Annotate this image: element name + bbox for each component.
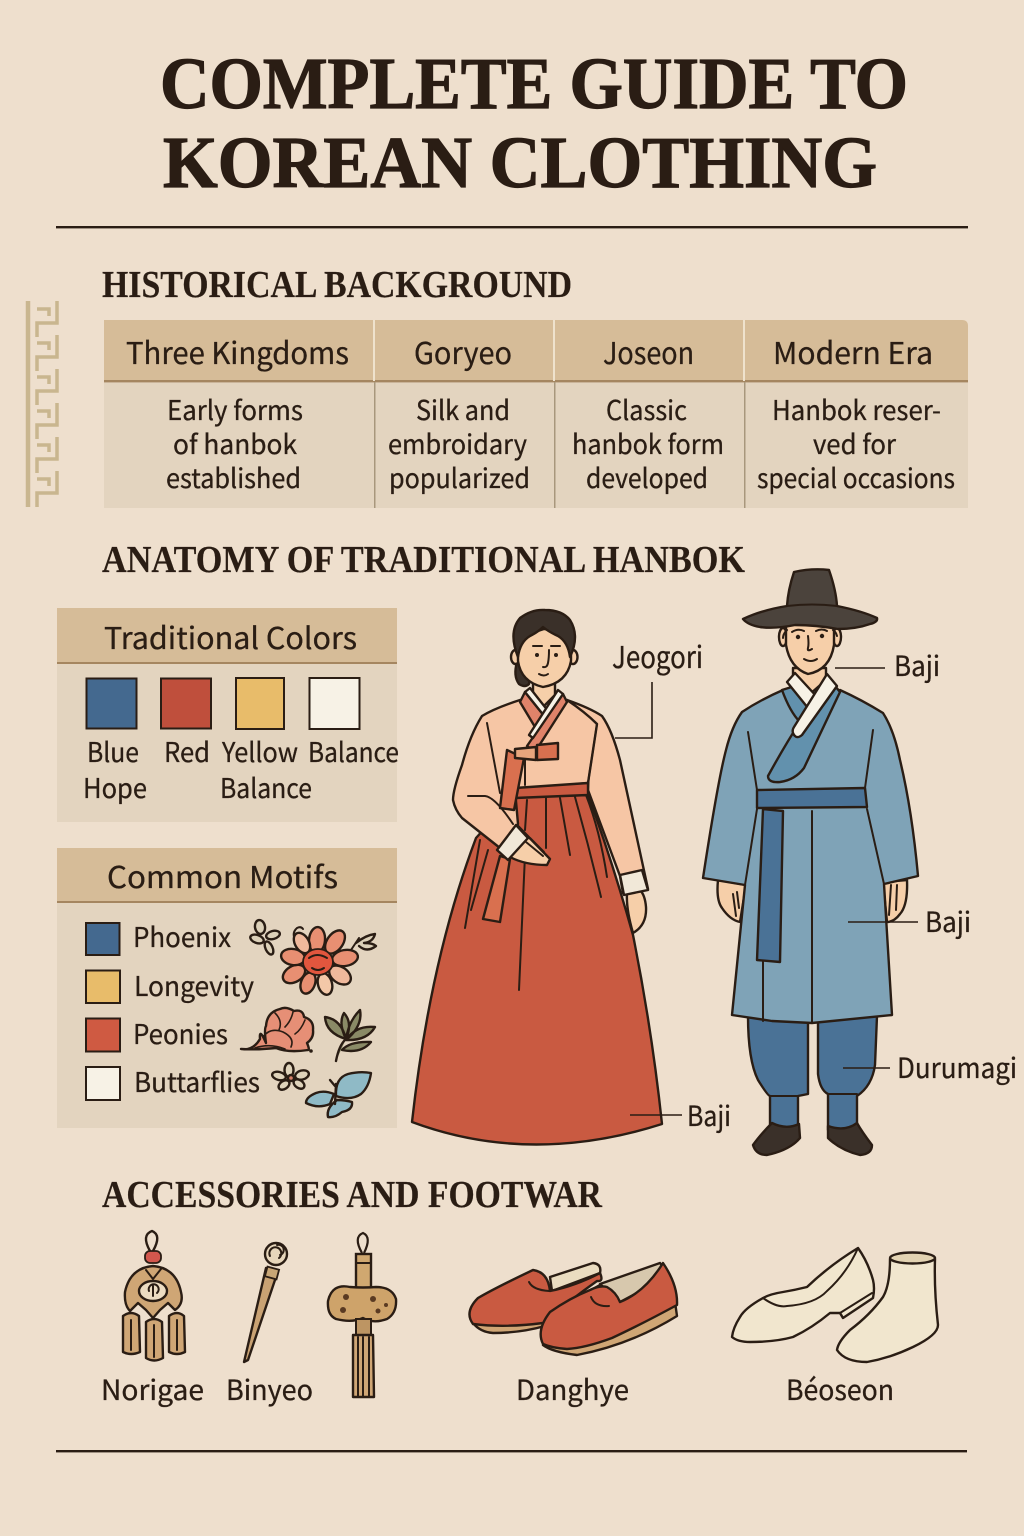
- white collar: [787, 673, 818, 708]
- heading: anatomy: ANATOMY OF TRADITIONAL HANBOK: [102, 539, 745, 581]
- skirt folds: [465, 795, 607, 990]
- swatch: red: [161, 678, 211, 728]
- label: Jeogori: [612, 633, 703, 738]
- era: Goryeo: embroidary: [388, 423, 527, 462]
- era: Goryeo: Silk and: [416, 389, 510, 428]
- era: Joseon: [572, 329, 724, 496]
- front hand and cuffs: [510, 826, 550, 865]
- icon: norigae: [123, 1231, 185, 1360]
- era: Modern Era: Hanbok reser-: [772, 389, 941, 428]
- label: Binyeo: Binyeo: [226, 1369, 313, 1409]
- bodice and left sleeve: [453, 700, 597, 848]
- era: Goryeo: [388, 329, 530, 496]
- label: Baji (neck): Baji: [894, 645, 940, 685]
- era: Modern Era: Modern Era: [773, 329, 933, 373]
- pants: [748, 1016, 808, 1130]
- era: Three Kingdoms: [126, 329, 349, 496]
- label: Baji (woman): Baji: [687, 1095, 731, 1135]
- era: Three Kingdoms: of hanbok: [173, 423, 297, 462]
- panel: traditional colors: Hope: [83, 767, 147, 806]
- panel: traditional colors: Traditional Colors: [104, 614, 357, 658]
- era: Modern Era: ved for: [813, 423, 896, 462]
- neck and ears: [793, 668, 826, 694]
- panel: traditional colors: Balance: [220, 767, 312, 806]
- era: Three Kingdoms: Early forms: [167, 389, 303, 428]
- icon: danghye shoes: [469, 1263, 677, 1355]
- panel: traditional colors: Balance: [308, 731, 399, 770]
- icon: small flower: [271, 1063, 310, 1092]
- hat: [743, 569, 877, 629]
- panel: history timeline table: [104, 320, 968, 508]
- label: Norigae: Norigae: [101, 1369, 204, 1409]
- panel: common motifs: Common Motifs: [107, 853, 338, 897]
- label: Baji (coat): Baji: [925, 901, 971, 941]
- label: Baji (woman): [630, 1095, 731, 1135]
- label: Danghye: Danghye: [516, 1369, 629, 1409]
- right collar: [527, 694, 567, 752]
- era: Three Kingdoms: established: [166, 457, 301, 496]
- swatch: white: [310, 678, 360, 729]
- title: COMPLETE GUIDE TO: [160, 43, 908, 124]
- era: Goryeo: popularized: [389, 457, 530, 496]
- panel: common motifs: [57, 848, 397, 1128]
- decorative greek key border: [28, 301, 57, 507]
- era: Modern Era: special occasions: [757, 457, 955, 496]
- panel: traditional colors: Blue: [87, 731, 139, 770]
- label: Durumagi: Durumagi: [897, 1047, 1017, 1087]
- era: Joseon: Joseon: [603, 329, 694, 373]
- hanging ties: [500, 750, 524, 810]
- panel: common motifs: Longevity: [134, 965, 254, 1004]
- era: Joseon: Classic: [606, 389, 687, 428]
- icon: butterfly: [306, 1072, 371, 1117]
- panel: common motifs: Phoenix: [133, 916, 232, 955]
- figure: man in durumagi: [703, 569, 918, 1155]
- hanging belt: [757, 809, 783, 962]
- right hand: [627, 890, 646, 933]
- icon: binyeo: [244, 1243, 287, 1362]
- icon: peony flower with leaves: [280, 926, 376, 996]
- label: Beoseon: Béoseon: [786, 1369, 894, 1409]
- belt: [757, 788, 867, 808]
- shoes: [753, 1123, 800, 1155]
- icon: beoseon socks: [732, 1248, 938, 1362]
- hair back: [515, 662, 531, 686]
- figure: woman in hanbok: [412, 610, 662, 1145]
- icon: small outline flower: [249, 919, 281, 956]
- right sleeve: [567, 700, 648, 893]
- panel: common motifs: Peonies: [133, 1013, 228, 1052]
- era: Goryeo: Goryeo: [414, 329, 512, 373]
- era: Modern Era: [757, 329, 955, 496]
- title: [160, 43, 908, 203]
- era: Joseon: developed: [586, 457, 708, 496]
- neck and face: [533, 678, 555, 706]
- panel: traditional colors: Yellow: [221, 731, 298, 770]
- label: Baji (neck): [835, 645, 940, 685]
- skirt: [412, 795, 662, 1145]
- hands: [718, 880, 746, 922]
- icon: leaf sprig: [325, 1010, 375, 1061]
- panel: traditional colors: Red: [164, 731, 210, 770]
- lapel: [768, 676, 840, 782]
- panel: common motifs: Buttarflies: [134, 1061, 260, 1100]
- heading: accessories: ACCESSORIES AND FOOTWAR: [102, 1174, 602, 1216]
- swatch: blue: [86, 678, 136, 728]
- swatch: yellow: [236, 678, 284, 729]
- hair top: [513, 610, 575, 657]
- era: Joseon: hanbok form: [572, 423, 724, 462]
- era: Three Kingdoms: Three Kingdoms: [126, 329, 349, 373]
- icon: peony blossom: [241, 1008, 313, 1051]
- label: Baji (coat): [848, 901, 971, 941]
- left collar: [520, 692, 549, 732]
- coat: [703, 690, 918, 1023]
- heading: historical background: HISTORICAL BACKGROUND: [102, 264, 572, 306]
- label: Jeogori: Jeogori: [612, 633, 703, 677]
- red waist band: [515, 783, 588, 798]
- panel: traditional colors: [57, 608, 399, 822]
- icon: coin pouch pendant: [328, 1233, 396, 1397]
- title: KOREAN CLOTHING: [163, 122, 877, 203]
